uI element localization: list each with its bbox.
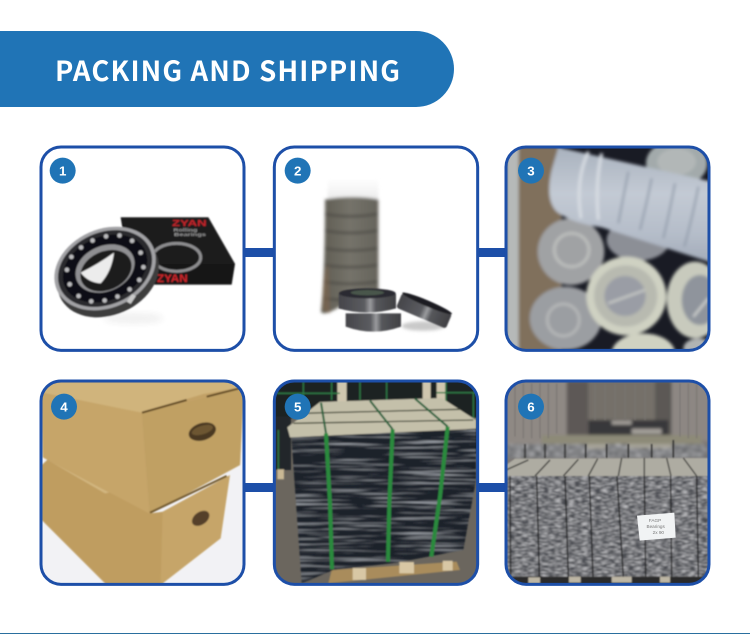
badge 4 (51, 394, 77, 420)
connector: step 1 to 2 (244, 248, 275, 257)
photo: bearing and black box (54, 216, 236, 324)
panel 4 frame (41, 381, 244, 584)
badge 1 (50, 158, 76, 184)
heading banner (0, 31, 454, 107)
panel 5: wrapped pallet (274, 381, 480, 584)
badge 6: 6 (527, 399, 535, 414)
photo: plastic tubes (508, 148, 708, 349)
photo: bearing and black box: ZYAN (157, 273, 188, 285)
panel 5 frame (274, 381, 478, 584)
pallet label (637, 513, 676, 541)
panel 4: stacked cartons (41, 381, 244, 585)
badge 5: 5 (294, 399, 302, 414)
pallet label: Bearings (646, 524, 666, 529)
badge 2 (285, 158, 311, 184)
badge 1: 1 (59, 163, 67, 178)
connector: step 2 to 3 (478, 248, 507, 257)
panel 6 frame (506, 381, 709, 584)
photo: bearing and black box: Bearings (174, 232, 206, 238)
panel 6: loaded container (506, 381, 709, 585)
panel 2: bearings in tube (274, 147, 478, 350)
panel 2 frame (274, 147, 478, 350)
connector: step 4 to 5 (244, 483, 275, 492)
photo: bearing and black box: ZYAN (172, 219, 207, 228)
panel 3 frame (506, 147, 709, 350)
panel 3: tubes in carton (504, 146, 710, 352)
photo: bearing and black box: Rolling (173, 228, 197, 234)
title: PACKING AND SHIPPING (55, 49, 400, 89)
photo: strapped pallet (274, 381, 480, 583)
connector: step 5 to 6 (478, 483, 507, 492)
badge 6 (518, 394, 544, 420)
panel 1: boxed bearing (41, 147, 244, 350)
photo: cardboard boxes (41, 381, 244, 585)
badge 3: 3 (527, 163, 535, 178)
bottom rule (0, 633, 750, 634)
badge 3 (518, 158, 544, 184)
badge 5 (285, 394, 311, 420)
pallet label: 2x 90 (653, 530, 664, 535)
photo: tube and loose bearings (321, 180, 445, 331)
panel 1 frame (41, 147, 244, 350)
pallet label: FAGP (649, 518, 661, 523)
photo: pallets in container (506, 381, 709, 459)
badge 2: 2 (294, 163, 301, 178)
badge 4: 4 (60, 399, 68, 414)
